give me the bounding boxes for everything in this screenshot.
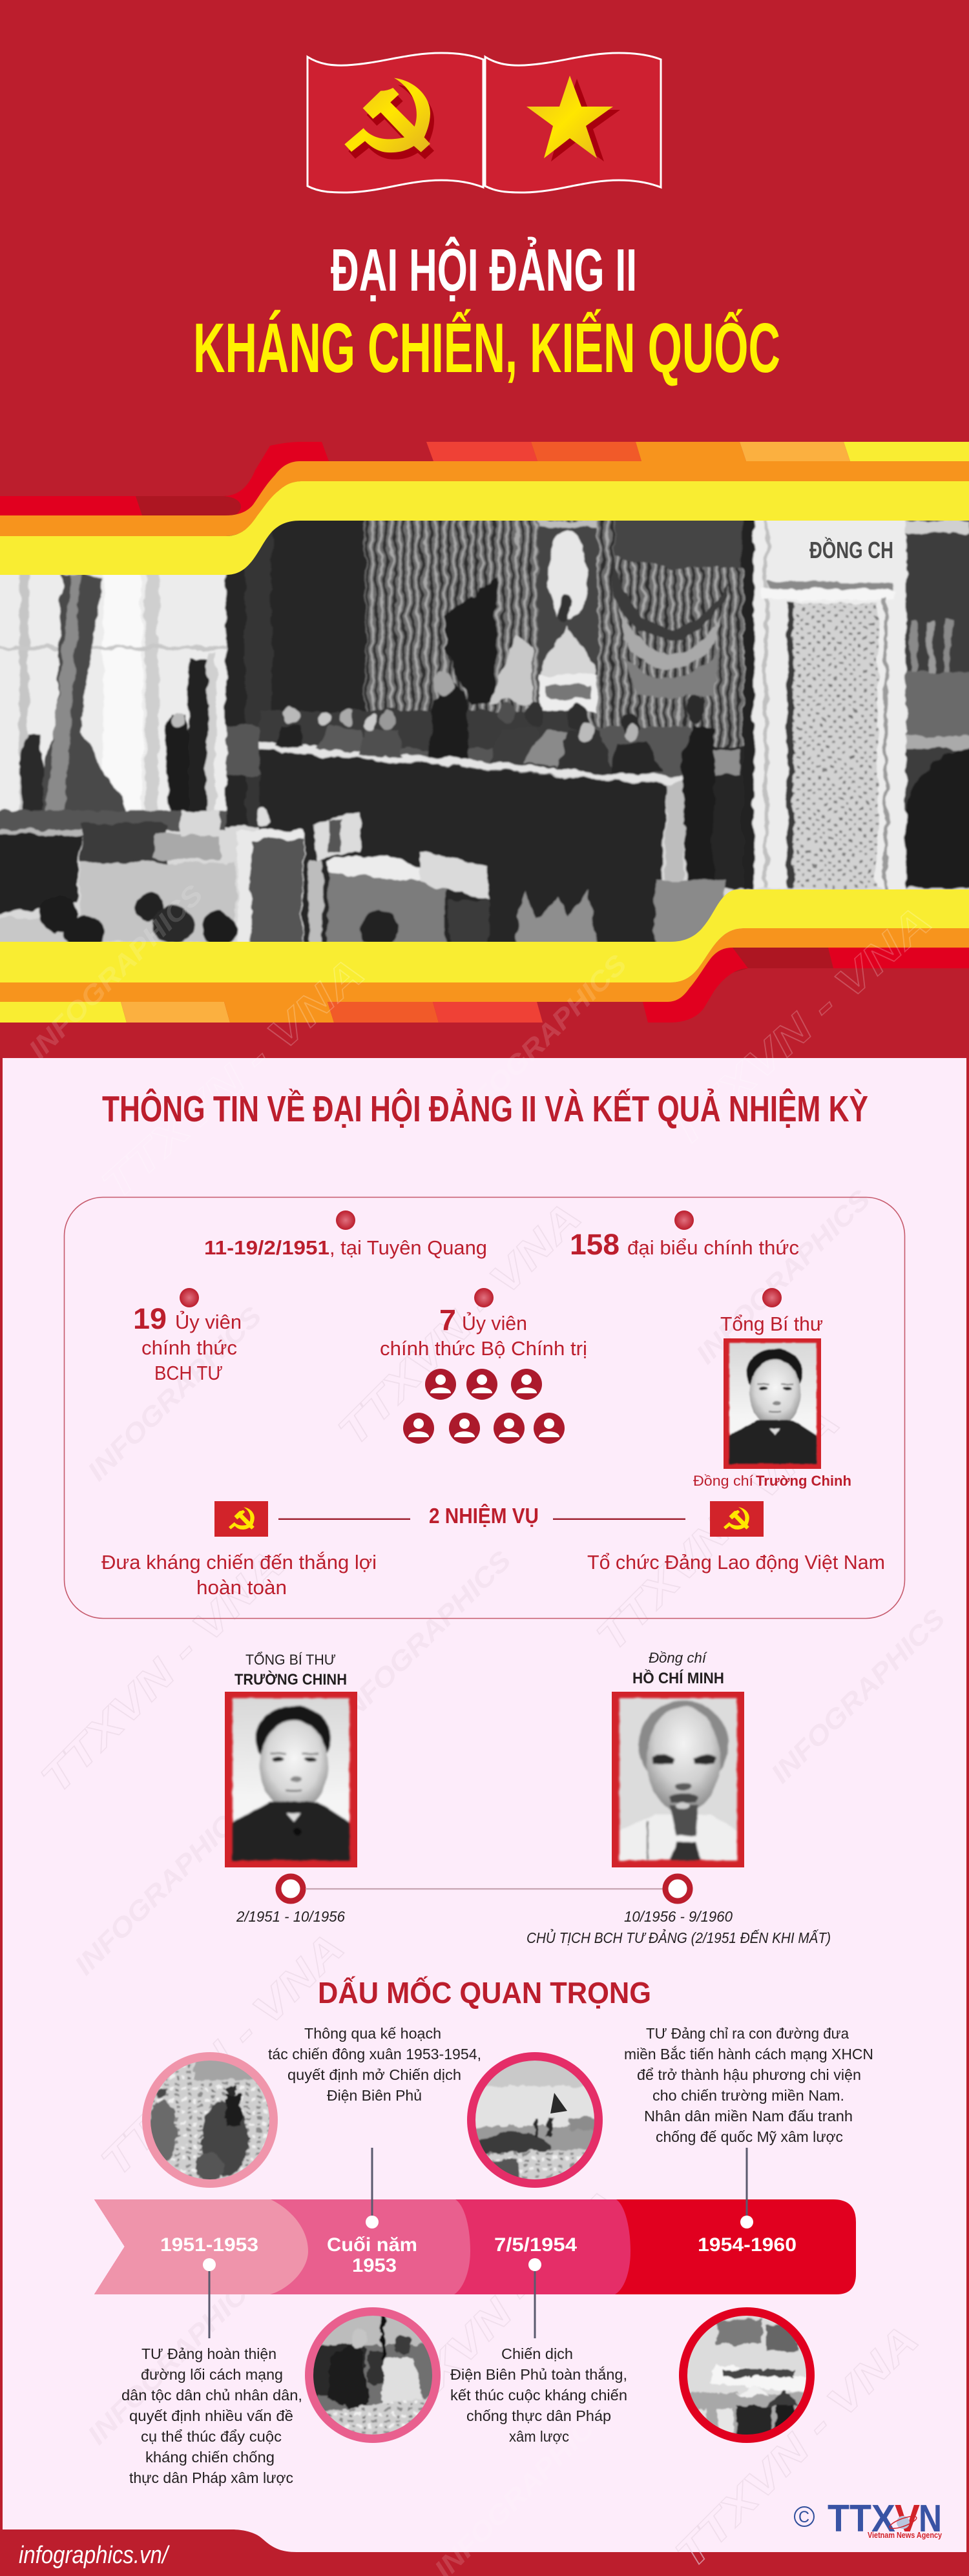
watermark: TTXVN - VNA xyxy=(92,1924,353,2185)
timeline connector xyxy=(306,1888,663,1890)
divider heading: two tasks: 2 NHIỆM VỤ xyxy=(429,1504,539,1528)
watermark: INFOGRAPHICS xyxy=(446,949,632,1134)
main photo: Party congress hall: ĐỒNG CH xyxy=(809,536,893,563)
milestone text: 1951-1953: thực dân Pháp xâm lược xyxy=(129,2469,293,2486)
panel: pink content area xyxy=(3,1058,966,2552)
fact: 19 central committee members: BCH TƯ xyxy=(154,1362,223,1384)
watermark: INFOGRAPHICS xyxy=(23,879,209,1065)
milestone text: 1954-1960: TƯ Đảng chỉ ra con đường đưa xyxy=(646,2025,849,2042)
fact: 19 central committee members: chính thức xyxy=(141,1336,237,1359)
fact: 19 central committee members xyxy=(133,1288,242,1384)
milestone text: late 1953 xyxy=(268,2025,481,2104)
milestone text: 1951-1953 xyxy=(121,2345,302,2486)
flag emblem xyxy=(307,53,661,192)
fact: 19 central committee members: Ủy viên xyxy=(175,1310,242,1333)
milestone text: 7/5/1954: Chiến dịch xyxy=(501,2345,573,2362)
leader: Hồ Chí Minh: 10/1956 - 9/1960 xyxy=(624,1908,733,1925)
task text: resistance: Đưa kháng chiến đến thắng lợi xyxy=(101,1551,377,1574)
task text: resistance: hoàn toàn xyxy=(196,1576,287,1599)
label: 7/5/1954: 7/5/1954 xyxy=(494,2234,577,2256)
task text: resistance xyxy=(101,1551,377,1599)
leader: Trường Chinh: TỔNG BÍ THƯ xyxy=(245,1652,336,1668)
watermark: TTXVN - VNA xyxy=(329,1193,590,1455)
milestone text: 1951-1953: TƯ Đảng hoàn thiện xyxy=(141,2345,276,2362)
fact: date and place: , tại Tuyên Quang xyxy=(329,1236,487,1259)
website credit: infographics.vn/ xyxy=(19,2542,170,2569)
photo circle: street protest xyxy=(678,2306,817,2445)
label: late 1953 xyxy=(327,2234,417,2276)
fact: date and place xyxy=(204,1210,487,1259)
fact: general secretary: Trường Chinh xyxy=(756,1473,851,1489)
photo circle: supply bicycles xyxy=(142,2052,278,2188)
heading: milestones: DẤU MỐC QUAN TRỌNG xyxy=(318,1976,651,2010)
fact: 158 delegates: 158 xyxy=(570,1228,620,1261)
icons: seven members xyxy=(403,1369,565,1444)
photo circle: leaders at work xyxy=(304,2306,443,2448)
milestone text: 1951-1953: dân tộc dân chủ nhân dân, xyxy=(121,2387,302,2404)
photo circle: Dien Bien Phu victory flag xyxy=(467,2052,603,2188)
logo: TTXVN: N xyxy=(919,2497,942,2540)
milestone text: 7/5/1954: chống thực dân Pháp xyxy=(466,2407,611,2424)
milestone text: 7/5/1954: kết thúc cuộc kháng chiến xyxy=(450,2387,627,2404)
logo: TTXVN: Vietnam News Agency xyxy=(868,2530,943,2540)
panel: congress facts xyxy=(65,1198,904,1619)
watermark: TTXVN - VNA xyxy=(666,2316,927,2576)
icon: yellow star xyxy=(526,76,620,161)
icon: party flag left xyxy=(214,1501,268,1537)
fact: 158 delegates xyxy=(570,1210,799,1261)
timeline bar xyxy=(94,2199,856,2294)
flag in photo xyxy=(550,2093,567,2114)
watermark: INFOGRAPHICS xyxy=(331,1545,517,1730)
fact: 7 politburo members: 7 xyxy=(439,1304,456,1336)
milestone text: 1951-1953: quyết định nhiều vấn đề xyxy=(129,2407,293,2424)
main photo: Party congress hall xyxy=(0,497,969,962)
milestone text: late 1953: quyết định mở Chiến dịch xyxy=(287,2066,461,2083)
ribbon: top xyxy=(0,442,969,575)
milestone text: late 1953: Thông qua kế hoạch xyxy=(304,2025,441,2042)
milestone text: 1951-1953: cụ thể thúc đẩy cuộc xyxy=(141,2428,282,2445)
milestone text: 1951-1953: kháng chiến chống xyxy=(145,2449,275,2466)
milestone text: 7/5/1954: xâm lược xyxy=(509,2428,569,2445)
fact: 7 politburo members: chính thức Bộ Chính trị xyxy=(380,1337,587,1360)
icon: party flag right xyxy=(710,1501,764,1537)
label: late 1953: Cuối năm xyxy=(327,2234,417,2256)
watermark: TTXVN - VNA xyxy=(587,1398,848,1660)
title: ĐẠI HỘI ĐẢNG II xyxy=(331,236,637,304)
milestone text: 7/5/1954: Điện Biên Phủ toàn thắng, xyxy=(450,2366,627,2383)
watermark: INFOGRAPHICS xyxy=(68,1795,255,1980)
milestone text: 1954-1960: cho chiến trường miền Nam. xyxy=(652,2087,844,2104)
fact: 7 politburo members xyxy=(380,1288,587,1360)
leader: Trường Chinh xyxy=(225,1652,357,1925)
fact: 158 delegates: đại biểu chính thức xyxy=(627,1236,799,1259)
milestone text: 1954-1960: chống đế quốc Mỹ xâm lược xyxy=(656,2128,843,2145)
leader: Hồ Chí Minh: HỒ CHÍ MINH xyxy=(632,1669,724,1687)
watermark: INFOGRAPHICS xyxy=(765,1603,951,1789)
watermark xyxy=(23,879,951,2576)
label: 1951-1953: 1951-1953 xyxy=(160,2234,258,2256)
watermark: TTXVN - VNA xyxy=(92,949,373,1208)
logo: TTXVN: V xyxy=(895,2497,920,2540)
fact: date and place: 11-19/2/1951 xyxy=(204,1236,329,1259)
milestone text: late 1953: Điện Biên Phủ xyxy=(327,2087,422,2104)
fact: 19 central committee members: 19 xyxy=(133,1302,167,1335)
watermark: INFOGRAPHICS xyxy=(81,2265,267,2450)
leader: Hồ Chí Minh xyxy=(526,1650,831,1946)
label: 1954-1960: 1954-1960 xyxy=(698,2234,797,2256)
watermark: INFOGRAPHICS xyxy=(81,1301,267,1486)
fact: general secretary: Đồng chí xyxy=(693,1473,753,1489)
icon: hammer and sickle xyxy=(344,78,434,160)
milestone text: 7/5/1954 xyxy=(450,2345,627,2445)
logo: TTXVN xyxy=(795,2497,943,2540)
fact: 7 politburo members: Ủy viên xyxy=(462,1311,527,1335)
logo: TTXVN: C xyxy=(798,2508,809,2526)
watermark: INFOGRAPHICS xyxy=(690,1184,876,1369)
milestone text: 1954-1960: để trở thành hậu phương chi viện xyxy=(637,2066,861,2083)
title xyxy=(193,236,780,388)
milestone text: 1951-1953: đường lối cách mạng xyxy=(141,2366,283,2383)
milestone text: 1954-1960: miền Bắc tiến hành cách mạng XHCN xyxy=(624,2046,873,2062)
footer band xyxy=(0,2529,969,2576)
fact: general secretary xyxy=(693,1288,851,1489)
leader: Hồ Chí Minh: Đồng chí xyxy=(649,1650,707,1666)
label: late 1953: 1953 xyxy=(352,2255,397,2276)
leader: Trường Chinh: TRƯỜNG CHINH xyxy=(234,1670,347,1688)
ribbon: bottom xyxy=(0,889,969,1023)
watermark: TTXVN - VNA xyxy=(660,897,941,1156)
leader: Hồ Chí Minh: CHỦ TỊCH BCH TƯ ĐẢNG (2/1951 ĐẾN KHI MẤT) xyxy=(526,1928,831,1946)
fact: general secretary: Tổng Bí thư xyxy=(720,1313,823,1335)
watermark: TTXVN - VNA xyxy=(369,2180,630,2442)
task text: organise labour party: Tổ chức Đảng Lao động Việt Nam xyxy=(587,1551,885,1574)
connector pins xyxy=(203,2148,753,2338)
milestone text: 1954-1960 xyxy=(624,2025,873,2145)
watermark: TTXVN - VNA xyxy=(32,1541,293,1802)
milestone text: late 1953: tác chiến đông xuân 1953-1954, xyxy=(268,2046,481,2062)
leader: Trường Chinh: 2/1951 - 10/1956 xyxy=(236,1908,345,1925)
logo: TTXVN: TTX xyxy=(828,2497,895,2540)
milestone text: 1954-1960: Nhân dân miền Nam đấu tranh xyxy=(644,2108,853,2124)
